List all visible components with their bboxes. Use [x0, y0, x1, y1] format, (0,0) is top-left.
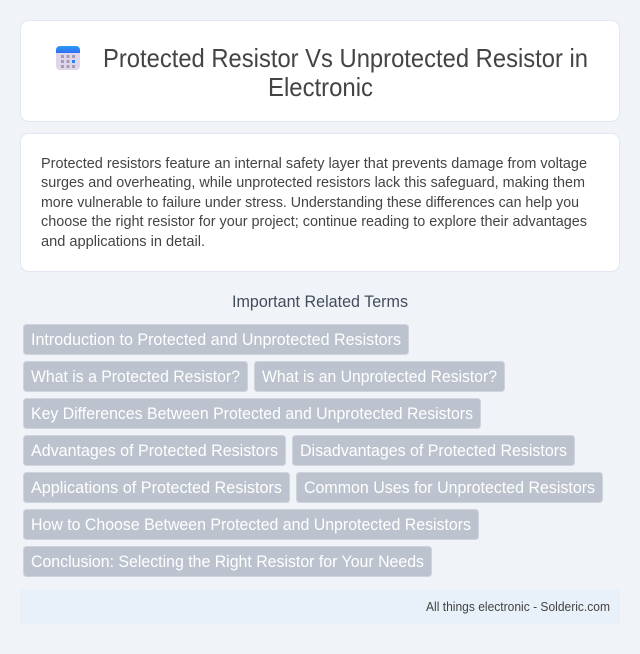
summary text: [41, 156, 587, 250]
heading: related terms: Important Related Terms: [232, 293, 408, 311]
chip: [254, 362, 504, 392]
summary text: and applications in detail.: [41, 234, 205, 250]
chip: Advantages of Protected Resistors: [31, 441, 278, 460]
chip: Conclusion: Selecting the Right Resistor for Your Needs: [31, 552, 424, 571]
summary text: surges and overheating, while unprotected resistors lack this safeguard, making them: [41, 175, 585, 191]
chip: [24, 362, 248, 392]
chip: Introduction to Protected and Unprotected Resistors: [31, 330, 401, 349]
footer: All things electronic - Solderic.com: [426, 600, 610, 614]
chip: [24, 324, 408, 354]
footer: [20, 590, 620, 624]
panel: title card: [20, 20, 620, 122]
panel: summary card: [20, 134, 620, 272]
title: Electronic: [268, 72, 373, 102]
chip: Common Uses for Unprotected Resistors: [304, 478, 595, 497]
chip: [24, 546, 432, 576]
chip: [24, 510, 478, 540]
chip: [24, 472, 290, 502]
chip: Disadvantages of Protected Resistors: [300, 441, 567, 460]
chip: What is a Protected Resistor?: [31, 367, 240, 386]
title: Protected Resistor Vs Unprotected Resistor in: [103, 43, 588, 73]
chip: [24, 398, 480, 428]
chip: How to Choose Between Protected and Unprotected Resistors: [31, 515, 471, 534]
related term chips: [24, 324, 602, 576]
chip: [296, 472, 602, 502]
summary text: choose the right resistor for your project; continue reading to explore their advantages: [41, 214, 587, 230]
chip: [292, 436, 574, 466]
chip: [24, 436, 286, 466]
icon: calendar: [56, 46, 80, 70]
summary text: more vulnerable to failure under stress. Understanding these differences can help you: [41, 195, 579, 211]
summary text: Protected resistors feature an internal safety layer that prevents damage from voltage: [41, 156, 587, 172]
chip: Key Differences Between Protected and Unprotected Resistors: [31, 404, 473, 423]
title: [103, 43, 588, 102]
chip: Applications of Protected Resistors: [31, 478, 282, 497]
chip: What is an Unprotected Resistor?: [262, 367, 497, 386]
